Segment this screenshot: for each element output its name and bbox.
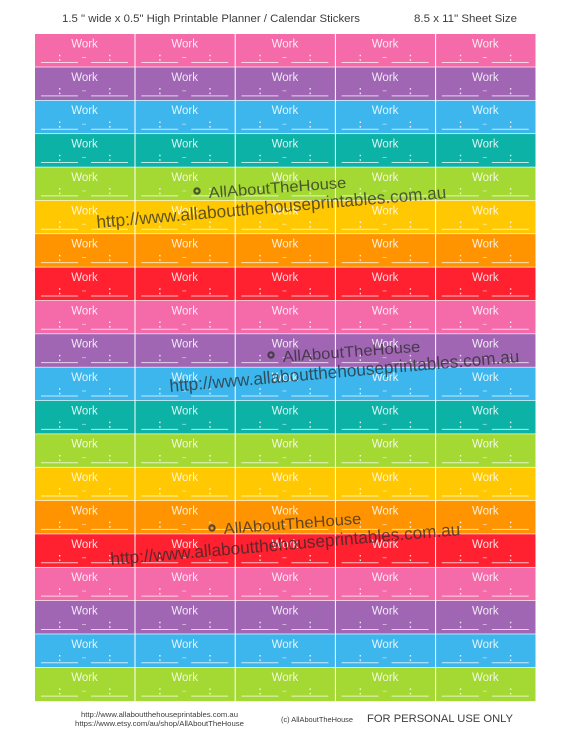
sticker row 6: yellow: Work [372, 205, 399, 217]
sticker row 10: purple: Work [372, 339, 399, 351]
sticker row 9: pink [35, 301, 536, 334]
sticker row 7: orange [35, 234, 536, 267]
sticker row 2: purple: Work [472, 72, 499, 84]
sticker row 13: green: Work [171, 439, 198, 451]
sticker row 13: green: Work [272, 439, 298, 451]
sticker row 6: yellow [35, 201, 536, 233]
sticker row 13: green: Work [71, 439, 98, 451]
sticker row 11: blue [35, 368, 536, 400]
sticker row 17: pink: Work [171, 572, 198, 584]
sticker row 9: pink: Work [171, 305, 198, 317]
sticker row 7: orange: Work [272, 239, 298, 251]
sticker row 15: orange: Work [372, 505, 399, 517]
sticker row 10: purple: Work [272, 339, 298, 351]
sticker row 17: pink: Work [472, 572, 499, 584]
sticker row 1: pink: Work [372, 38, 399, 50]
sticker row 5: green: Work [71, 172, 98, 184]
sticker row 20: green: Work [272, 672, 298, 684]
watermark brand name: AllAboutTheHouse [223, 511, 362, 538]
sticker row 2: purple [35, 67, 536, 100]
sticker row 20: green: Work [171, 672, 198, 684]
sticker row 1: pink: Work [171, 38, 198, 50]
sticker row 5: green: Work [372, 172, 399, 184]
sticker row 11: blue: Work [71, 372, 98, 384]
sticker row 15: orange: Work [272, 505, 298, 517]
sticker row 2: purple: Work [71, 72, 98, 84]
sticker row 4: teal: Work [472, 139, 499, 151]
icon: copyright logo [194, 188, 200, 194]
watermark brand name: AllAboutTheHouse [282, 339, 421, 366]
watermark url: http://www.allaboutthehouseprintables.com.au [96, 182, 447, 232]
sticker row 4: teal: Work [272, 139, 298, 151]
sticker row 20: green: Work [372, 672, 399, 684]
sticker row 6: yellow: Work [71, 205, 98, 217]
sticker row 2: purple: Work [272, 72, 298, 84]
sticker row 3: blue [35, 101, 536, 133]
sticker row 18: purple [35, 601, 536, 634]
sticker row 4: teal [35, 134, 536, 167]
sticker row 20: green: Work [71, 672, 98, 684]
sticker row 3: blue: Work [171, 105, 198, 117]
sticker row 18: purple: Work [171, 605, 198, 617]
watermark 2 [169, 339, 520, 396]
sticker row 8: red: Work [472, 272, 499, 284]
sticker row 12: teal [35, 401, 536, 434]
sticker row 7: orange: Work [372, 239, 399, 251]
sticker row 14: yellow: Work [472, 472, 499, 484]
sticker row 14: yellow [35, 468, 536, 500]
sticker row 19: blue: Work [372, 639, 399, 651]
sticker row 3: blue: Work [71, 105, 98, 117]
sticker row 3: blue: Work [272, 105, 298, 117]
sticker row 10: purple: Work [472, 339, 499, 351]
sticker row 13: green [35, 434, 536, 467]
icon: copyright logo [209, 525, 215, 531]
sticker row 5: green [35, 167, 536, 200]
sticker row 16: red: Work [171, 539, 198, 551]
sticker row 6: yellow: Work [272, 205, 298, 217]
sticker row 15: orange: Work [171, 505, 198, 517]
sticker row 7: orange: Work [472, 239, 499, 251]
sticker row 9: pink: Work [372, 305, 399, 317]
sticker row 11: blue: Work [372, 372, 399, 384]
sticker row 20: green: Work [472, 672, 499, 684]
footer website url: http://www.allaboutthehouseprintables.com.au [81, 710, 238, 719]
sticker row 15: orange: Work [71, 505, 98, 517]
sticker row 19: blue: Work [71, 639, 98, 651]
sticker row 3: blue: Work [372, 105, 399, 117]
sticker row 1: pink: Work [272, 38, 298, 50]
sticker row 18: purple: Work [71, 605, 98, 617]
sticker row 1: pink [35, 34, 536, 67]
sticker row 8: red: Work [71, 272, 98, 284]
sticker row 4: teal: Work [71, 139, 98, 151]
sticker row 15: orange: Work [472, 505, 499, 517]
sticker row 12: teal: Work [272, 405, 298, 417]
sticker row 16: red: Work [372, 539, 399, 551]
sticker row 19: blue: Work [272, 639, 298, 651]
sticker sheet [35, 34, 536, 701]
sticker row 10: purple [35, 334, 536, 367]
watermark 3 [110, 511, 461, 569]
sticker row 14: yellow: Work [71, 472, 98, 484]
sticker row 7: orange: Work [171, 239, 198, 251]
sticker row 11: blue: Work [472, 372, 499, 384]
sticker row 8: red: Work [171, 272, 198, 284]
watermark url: http://www.allaboutthehouseprintables.com.au [169, 346, 520, 396]
sticker row 16: red: Work [71, 539, 98, 551]
sticker row 15: orange [35, 501, 536, 534]
sticker row 8: red [35, 267, 536, 300]
sticker row 17: pink: Work [272, 572, 298, 584]
sticker row 4: teal: Work [171, 139, 198, 151]
sticker row 2: purple: Work [372, 72, 399, 84]
sticker row 9: pink: Work [472, 305, 499, 317]
sticker row 5: green: Work [472, 172, 499, 184]
sticker row 17: pink: Work [372, 572, 399, 584]
sticker row 19: blue: Work [171, 639, 198, 651]
sticker row 1: pink: Work [71, 38, 98, 50]
sticker row 17: pink [35, 568, 536, 600]
sticker row 1: pink: Work [472, 38, 499, 50]
watermark url: http://www.allaboutthehouseprintables.com.au [110, 519, 461, 569]
sticker row 7: orange: Work [71, 239, 98, 251]
sticker row 12: teal: Work [472, 405, 499, 417]
sticker row 8: red: Work [272, 272, 298, 284]
sticker row 8: red: Work [372, 272, 399, 284]
footer copyright: (c) AllAboutTheHouse [281, 715, 353, 724]
sticker row 13: green: Work [472, 439, 499, 451]
sticker row 9: pink: Work [272, 305, 298, 317]
sticker row 10: purple: Work [71, 339, 98, 351]
sticker row 14: yellow: Work [372, 472, 399, 484]
sticker row 17: pink: Work [71, 572, 98, 584]
sticker row 18: purple: Work [472, 605, 499, 617]
sticker row 16: red [35, 534, 536, 567]
sticker row 16: red: Work [472, 539, 499, 551]
sticker row 12: teal: Work [71, 405, 98, 417]
sticker row 3: blue: Work [472, 105, 499, 117]
sticker row 19: blue: Work [472, 639, 499, 651]
sticker row 5: green: Work [171, 172, 198, 184]
icon: copyright logo [268, 352, 274, 358]
sticker row 14: yellow: Work [171, 472, 198, 484]
title: 1.5 " wide x 0.5" High Printable Planner / Calendar Stickers [62, 13, 361, 25]
sticker row 14: yellow: Work [272, 472, 298, 484]
watermark 1 [96, 175, 447, 232]
sticker row 5: green: Work [272, 172, 298, 184]
sticker row 12: teal: Work [372, 405, 399, 417]
sticker row 18: purple: Work [372, 605, 399, 617]
sticker row 6: yellow: Work [171, 205, 198, 217]
sticker row 18: purple: Work [272, 605, 298, 617]
sticker row 20: green [35, 668, 536, 701]
sticker row 10: purple: Work [171, 339, 198, 351]
sticker row 6: yellow: Work [472, 205, 499, 217]
sticker row 11: blue: Work [171, 372, 198, 384]
sticker row 13: green: Work [372, 439, 399, 451]
sticker row 12: teal: Work [171, 405, 198, 417]
watermark brand name: AllAboutTheHouse [208, 175, 347, 202]
footer etsy url: https://www.etsy.com/au/shop/AllAboutTheHouse [75, 719, 244, 728]
sticker row 16: red: Work [272, 539, 298, 551]
sticker row 19: blue [35, 634, 536, 667]
sticker row 11: blue: Work [272, 372, 298, 384]
sheet size label: 8.5 x 11" Sheet Size [414, 13, 517, 25]
sticker row 2: purple: Work [171, 72, 198, 84]
sticker row 9: pink: Work [71, 305, 98, 317]
sticker row 4: teal: Work [372, 139, 399, 151]
personal use notice: FOR PERSONAL USE ONLY [367, 713, 514, 725]
